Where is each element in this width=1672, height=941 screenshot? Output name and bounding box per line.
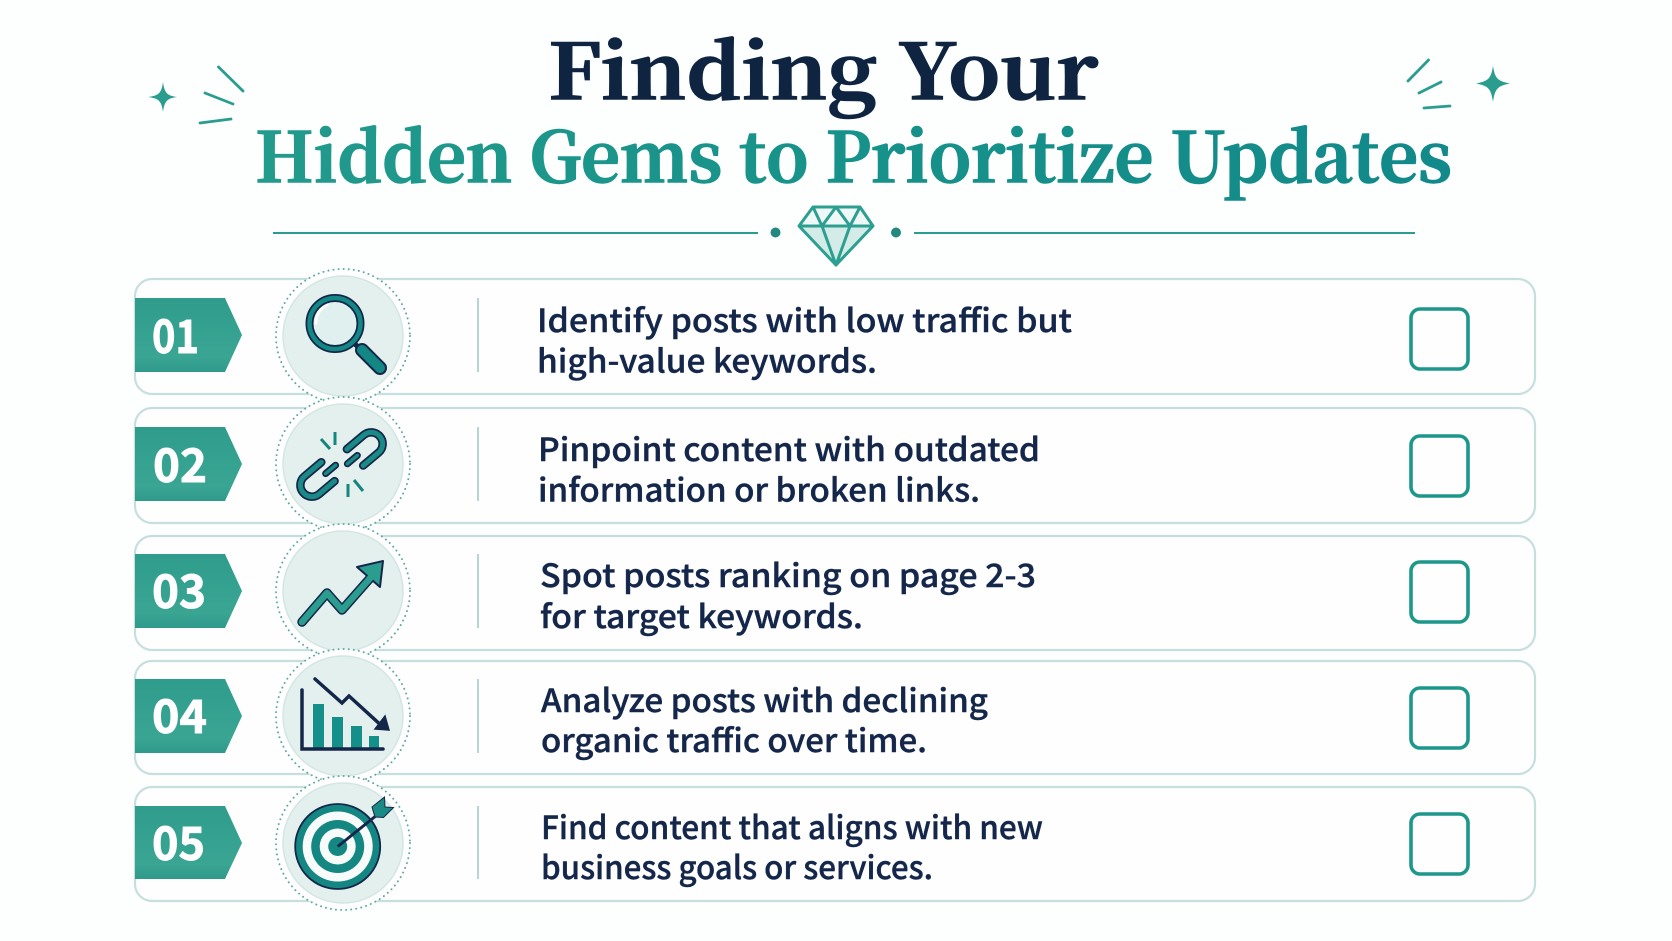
icon: rising arrow [276,524,410,658]
checkbox [1411,562,1468,622]
step text: Find content that aligns with new [541,803,1043,849]
step text: information or broken links. [538,466,980,512]
step text: Spot posts ranking on page 2-3 [540,551,1036,597]
title line 2: Hidden Gems to Prioritize Updates [255,103,1452,202]
number badge 04: 04 [152,681,207,747]
icon: declining bar chart [276,649,410,783]
number badge 05: 05 [152,808,205,874]
title [255,12,1452,202]
step text: Identify posts with low traffic but [537,296,1072,342]
step text [541,676,988,762]
icon: diamond [799,207,873,265]
step text: organic traffic over time. [541,716,927,762]
checkbox [1411,814,1468,874]
panel: row 5 [135,787,1535,901]
checkbox [1411,688,1468,748]
step text: Analyze posts with declining [541,676,988,722]
number badge 03: 03 [152,556,206,622]
divider [477,679,479,753]
number badge 02 [135,427,242,501]
right sparkle decoration [1408,60,1510,108]
step text [540,551,1036,638]
icon: broken chain link [276,397,410,531]
number badge 02: 02 [153,430,207,496]
step text: Pinpoint content with outdated [538,425,1040,471]
checkbox [1411,436,1468,496]
step text [541,803,1043,889]
number badge 01 [135,298,242,372]
number badge 04 [135,679,242,753]
divider with diamond [273,207,1415,265]
number badge 01: 01 [152,301,199,367]
divider [477,806,479,879]
number badge 03 [135,554,242,628]
step text [538,425,1040,512]
panel: row 1 [135,279,1535,394]
icon: target with arrow [276,776,410,910]
step text: for target keywords. [540,592,863,638]
divider [477,554,479,628]
divider [477,298,479,372]
step text: high-value keywords. [537,336,877,382]
step text: business goals or services. [541,843,933,889]
title line 1: Finding Your [548,12,1098,121]
icon: magnifying glass [276,269,410,403]
left sparkle decoration [148,67,243,123]
divider [477,427,479,501]
checkbox [1411,309,1468,369]
number badge 05 [135,806,242,879]
panel: row 3 [135,536,1535,650]
step text [537,296,1072,382]
panel: row 4 [135,661,1535,774]
panel: row 2 [135,408,1535,523]
